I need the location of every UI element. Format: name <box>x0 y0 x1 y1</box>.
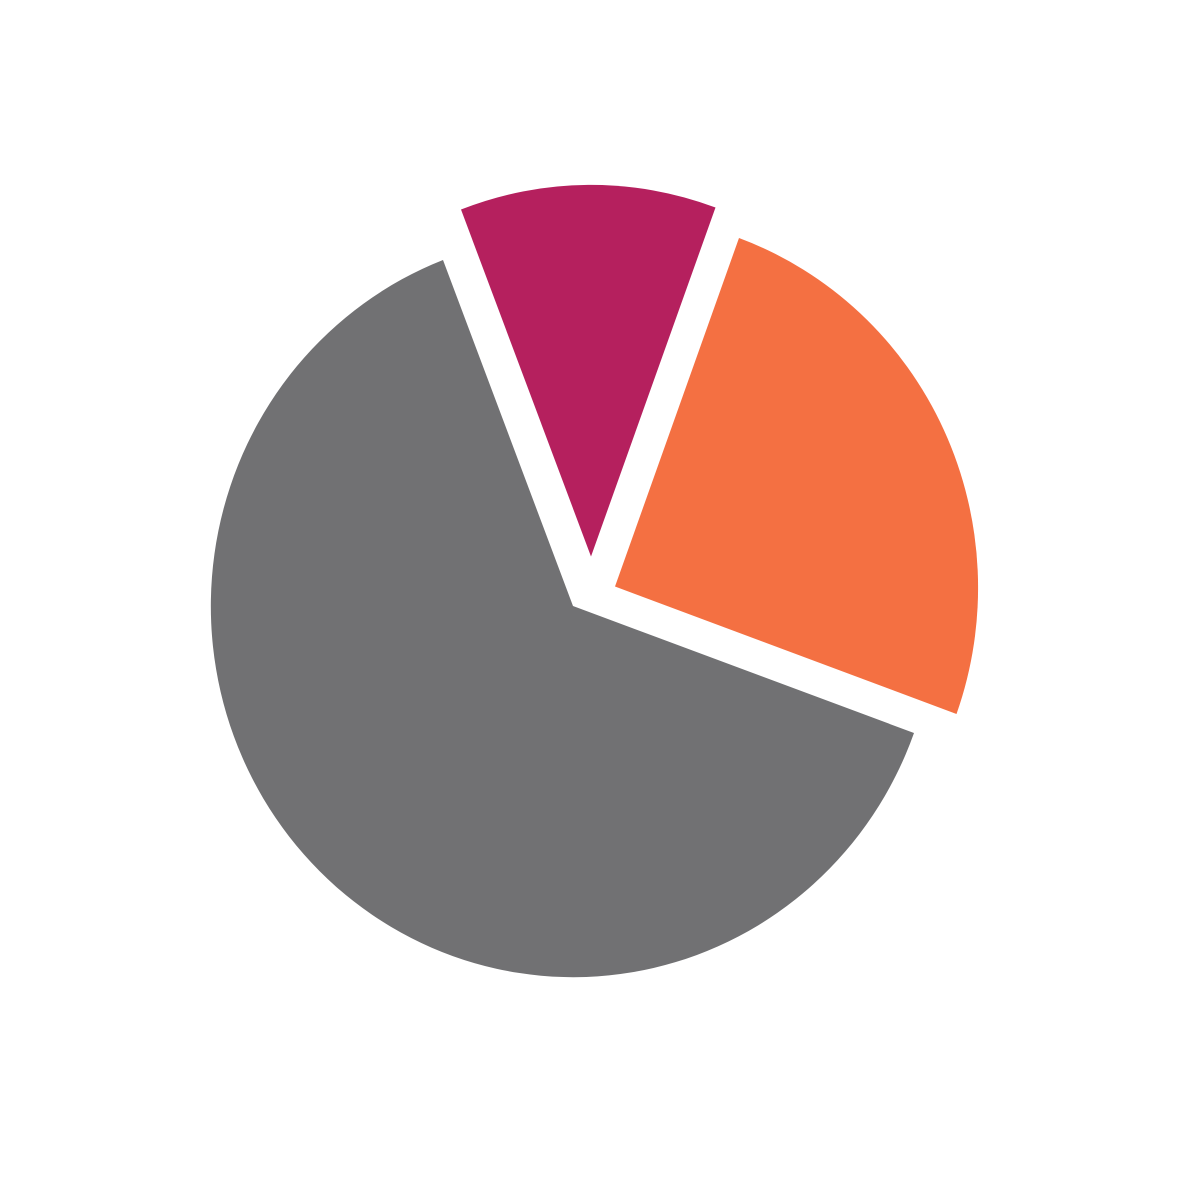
slice: gray (largest) <box>211 260 914 977</box>
slice: orange (medium) <box>615 238 978 714</box>
slice: magenta (smallest) <box>461 185 716 556</box>
